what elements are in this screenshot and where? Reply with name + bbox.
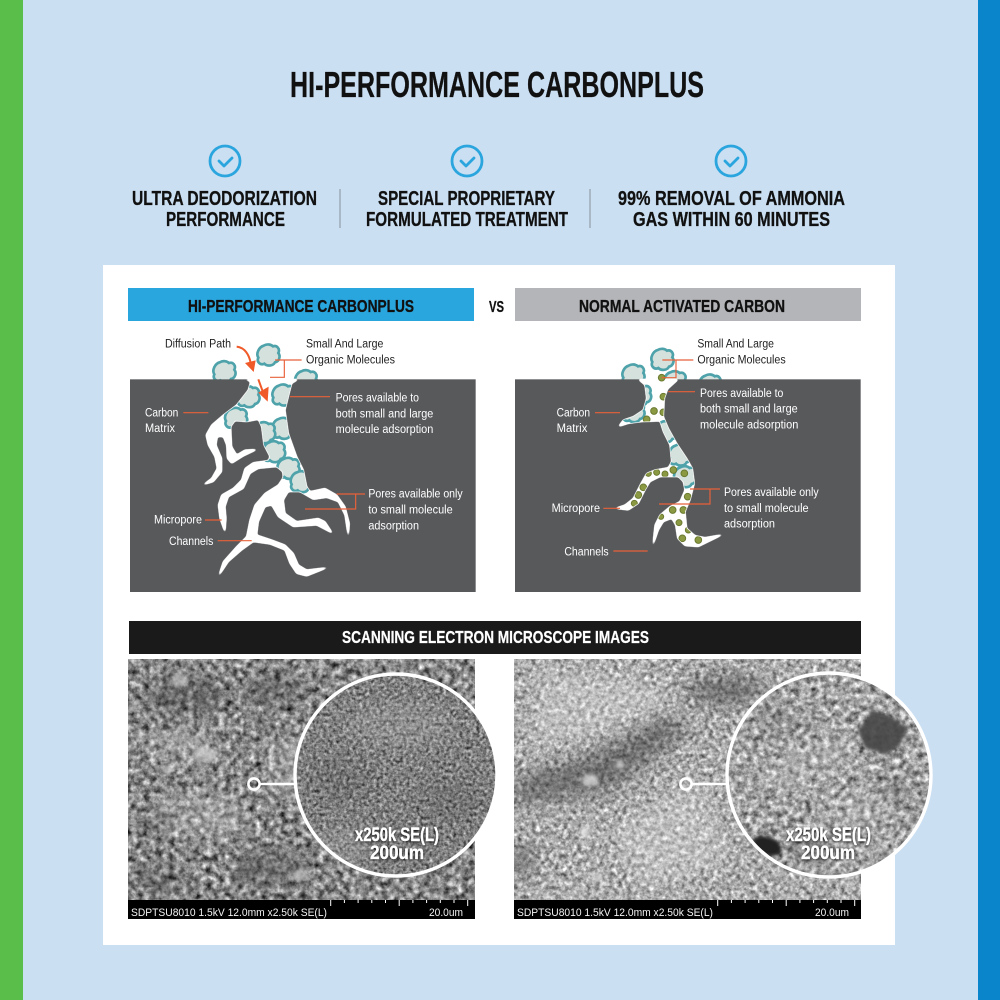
diagram labels: Micropore	[552, 501, 600, 515]
diagram labels	[145, 337, 463, 548]
micrograph texture	[512, 659, 861, 900]
pore channels	[615, 379, 723, 547]
micrograph texture	[128, 659, 475, 900]
heading bar: hi-performance carbonplus: HI-PERFORMANCE CARBONPLUS	[188, 296, 414, 316]
SEM image: normal carbon	[512, 659, 861, 919]
magnification label: x250k SE(L)	[786, 825, 871, 846]
magnification label: x250k SE(L)	[355, 825, 439, 846]
molecules above surface	[213, 344, 317, 391]
info bar	[128, 900, 475, 919]
heading bar: hi-performance carbonplus	[128, 288, 474, 321]
diagram labels: Small And Large	[697, 337, 774, 351]
blue side band	[978, 0, 1000, 1000]
benefit: ultra deodorization	[132, 146, 317, 231]
SEM image: carbonplus	[128, 659, 475, 919]
icon: check circle	[210, 146, 240, 176]
diagram labels: Diffusion Path	[165, 337, 231, 351]
diagram labels: both small and large	[336, 406, 433, 420]
leader lines	[183, 360, 365, 541]
heading bar: scanning electron microscope images: SCANNING ELECTRON MICROSCOPE IMAGES	[342, 627, 649, 647]
diagram: normal activated carbon pores	[515, 337, 861, 592]
diagram labels: to small molecule	[368, 503, 453, 517]
diagram: hi-performance carbonplus pores	[130, 337, 476, 592]
info bar	[514, 900, 861, 919]
zoomed texture	[294, 672, 498, 878]
diagram labels: Channels	[564, 544, 609, 558]
benefit text: 99% REMOVAL OF AMMONIA	[618, 188, 845, 210]
vs label: VS	[489, 299, 504, 316]
magnification label: 200um	[370, 843, 424, 864]
pore channels	[203, 379, 349, 577]
diagram labels: adsorption	[368, 518, 419, 532]
diagram labels: Small And Large	[306, 337, 383, 351]
molecules inside pores	[225, 384, 313, 492]
heading bar: normal activated carbon: NORMAL ACTIVATED CARBON	[579, 296, 785, 316]
diagram labels: molecule adsorption	[336, 422, 433, 436]
benefit: proprietary treatment	[366, 146, 568, 231]
small molecules	[631, 393, 702, 543]
diagram labels: Carbon	[557, 406, 590, 420]
diagram labels: adsorption	[724, 517, 775, 531]
magnification label	[786, 825, 871, 864]
diagram labels	[552, 337, 819, 558]
scale ticks	[718, 900, 855, 906]
magnification label	[355, 825, 439, 864]
diagram labels: Pores available to	[700, 386, 783, 400]
diagram labels: Channels	[169, 534, 213, 548]
info text: SDPTSU8010 1.5kV 12.0mm x2.50k SE(L)	[131, 907, 327, 919]
top small molecule	[658, 374, 665, 381]
zoomed texture	[726, 672, 932, 878]
lens ring	[295, 674, 497, 876]
diagram labels: both small and large	[700, 402, 798, 416]
diagram labels: Carbon	[145, 406, 178, 420]
benefit: ammonia removal	[618, 146, 845, 231]
heading bar: normal activated carbon	[515, 288, 861, 321]
carbon matrix block	[130, 379, 476, 592]
icon: check circle	[452, 146, 482, 176]
scale ticks	[331, 900, 468, 906]
diagram labels: Pores available only	[724, 485, 819, 499]
benefit text: PERFORMANCE	[166, 209, 285, 231]
green side band	[0, 0, 23, 1000]
diagram labels: Matrix	[557, 421, 588, 435]
diagram labels: Pores available only	[368, 487, 463, 501]
benefit text	[366, 188, 568, 231]
benefit text: GAS WITHIN 60 MINUTES	[633, 209, 830, 231]
molecules above surface	[622, 349, 721, 396]
scale text: 20.0um	[815, 907, 849, 919]
diagram labels: Pores available to	[336, 391, 419, 405]
magnification label: 200um	[801, 843, 855, 864]
title: HI-PERFORMANCE CARBONPLUS	[290, 64, 704, 105]
benefit text	[132, 188, 317, 231]
heading bar: scanning electron microscope images	[129, 621, 861, 654]
magnifier: carbonplus	[248, 672, 498, 878]
arrows: diffusion path	[237, 347, 269, 402]
white content panel	[103, 265, 895, 945]
diagram labels: molecule adsorption	[700, 417, 798, 431]
magnifier: normal carbon	[680, 672, 932, 878]
diagram labels: Micropore	[154, 513, 202, 527]
leader lines	[595, 360, 720, 551]
marker and connector	[248, 778, 297, 790]
benefit text	[618, 188, 845, 231]
lens ring	[727, 673, 931, 877]
diagram labels: Organic Molecules	[697, 353, 786, 367]
diagram labels: Matrix	[145, 421, 176, 435]
benefit text: FORMULATED TREATMENT	[366, 209, 568, 231]
marker and connector	[680, 778, 729, 790]
benefit text: ULTRA DEODORIZATION	[132, 188, 317, 210]
benefit text: SPECIAL PROPRIETARY	[378, 188, 555, 210]
diagram labels: Organic Molecules	[306, 353, 395, 367]
info text: SDPTSU8010 1.5kV 12.0mm x2.50k SE(L)	[517, 907, 713, 919]
icon: check circle	[716, 146, 746, 176]
scale text: 20.0um	[429, 907, 463, 919]
diagram labels: to small molecule	[724, 501, 809, 515]
molecules inside pores	[622, 384, 696, 487]
carbon matrix block	[515, 379, 861, 592]
